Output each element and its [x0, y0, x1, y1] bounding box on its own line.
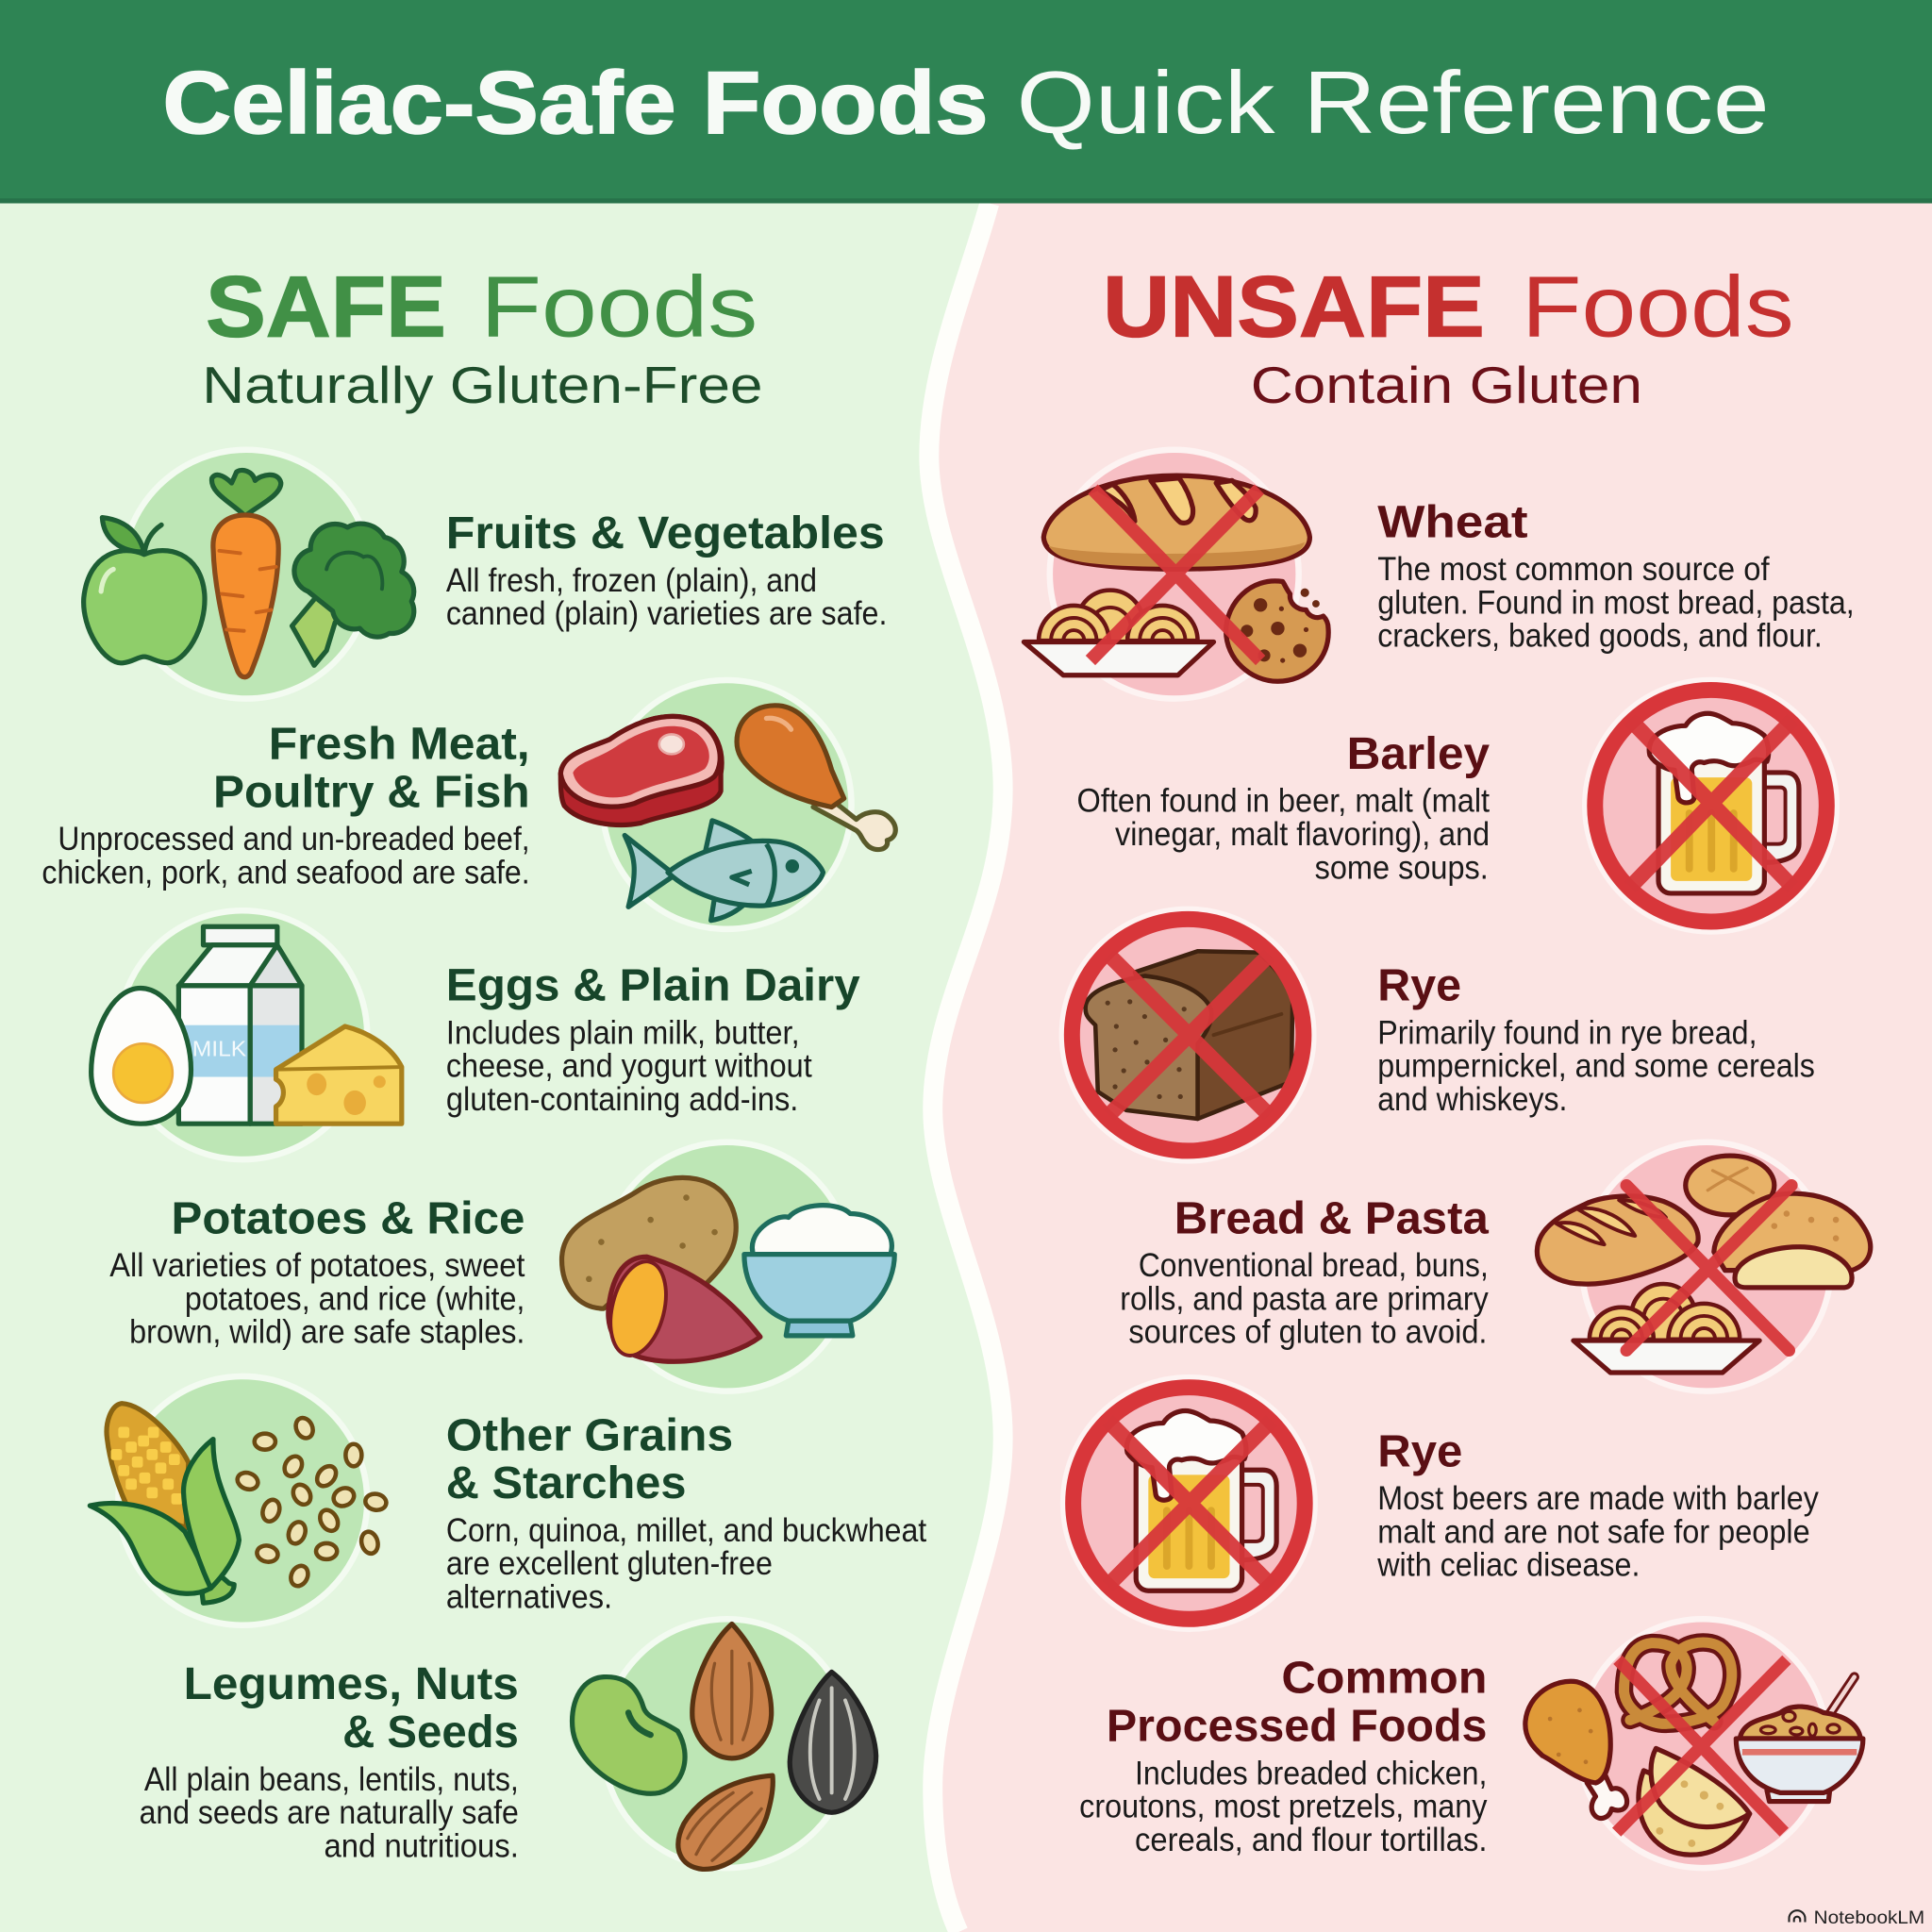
text: barley: Barley — [1347, 728, 1490, 779]
text: potatoes and rice — [109, 1192, 525, 1351]
text: rye — [1377, 960, 1815, 1118]
icon: chicken drumstick — [737, 706, 895, 850]
icon: bread loaf — [1043, 475, 1309, 569]
text: bread and pasta — [1120, 1192, 1490, 1351]
text: rye beer: Rye — [1377, 1425, 1462, 1476]
panel: rye beer — [1063, 1377, 1315, 1629]
text: legumes nuts seeds: All plain beans, lentils, nuts, — [144, 1761, 519, 1798]
panel: meat poultry fish — [560, 680, 895, 929]
icon: cookie — [1226, 581, 1328, 681]
heading: safe foods — [202, 259, 762, 414]
text: meat poultry fish: Poultry & Fish — [213, 767, 530, 818]
icon: pretzel — [1624, 1642, 1732, 1724]
icon: cross — [1109, 955, 1269, 1115]
icon: bean — [573, 1677, 685, 1793]
text: rye beer: with celiac disease. — [1376, 1547, 1640, 1584]
icon: cross — [1626, 1185, 1791, 1351]
text: processed foods — [1079, 1653, 1488, 1858]
icon: corn — [90, 1404, 239, 1603]
text: other grains: & Starches — [446, 1457, 687, 1508]
text: fruits and vegetables: canned (plain) varieties are safe. — [446, 595, 887, 632]
heading: safe foods: Foods — [480, 259, 758, 356]
text: other grains: Other Grains — [446, 1409, 733, 1460]
text: eggs and dairy: cheese, and yogurt without — [446, 1048, 812, 1085]
text: barley: vinegar, malt flavoring), and — [1115, 816, 1490, 853]
text: rye: Rye — [1377, 960, 1461, 1011]
icon: milk carton: MILK — [192, 1036, 247, 1060]
watermark: NotebookLM: NotebookLM — [1814, 1907, 1924, 1928]
text: other grains: are excellent gluten-free — [446, 1545, 773, 1582]
panel: legumes nuts seeds — [573, 1619, 876, 1869]
icon: broccoli — [292, 524, 414, 665]
title: Celiac-Safe Foods — [162, 53, 989, 152]
text: legumes nuts seeds: and nutritious. — [325, 1827, 519, 1864]
icon: loaf — [1537, 1196, 1698, 1284]
text: wheat — [1377, 496, 1855, 655]
text: processed foods: Processed Foods — [1107, 1701, 1487, 1752]
text: processed foods: Common — [1281, 1653, 1487, 1704]
text: barley: Often found in beer, malt (malt — [1077, 783, 1490, 820]
text: wheat: crackers, baked goods, and flour. — [1377, 618, 1823, 655]
panel: barley — [1585, 680, 1837, 931]
heading: unsafe foods: UNSAFE — [1103, 259, 1485, 356]
text: potatoes and rice: potatoes, and rice (white, — [185, 1280, 525, 1317]
text: barley — [1077, 728, 1490, 886]
text: bread and pasta: Conventional bread, buns, — [1139, 1247, 1489, 1284]
text: eggs and dairy: Eggs & Plain Dairy — [446, 960, 860, 1011]
text: rye: and whiskeys. — [1377, 1081, 1567, 1118]
icon: pasta plate — [1574, 1284, 1759, 1373]
heading: safe foods: Naturally Gluten-Free — [202, 356, 762, 414]
heading: unsafe foods: Foods — [1522, 259, 1794, 356]
panel: wheat — [1024, 450, 1328, 699]
panel: eggs and dairy — [92, 910, 402, 1159]
text: legumes nuts seeds — [140, 1658, 519, 1864]
text: other grains — [446, 1409, 926, 1615]
text: meat poultry fish: Fresh Meat, — [269, 719, 530, 770]
text: meat poultry fish: chicken, pork, and seafood are safe. — [42, 854, 530, 891]
text: potatoes and rice: Potatoes & Rice — [172, 1192, 525, 1243]
text: meat poultry fish: Unprocessed and un-breaded beef, — [58, 821, 530, 858]
text: eggs and dairy: Includes plain milk, butter, — [446, 1014, 800, 1051]
text: wheat: The most common source of — [1377, 551, 1770, 588]
panel: processed foods — [1525, 1619, 1863, 1868]
icon: beer mug — [1126, 1411, 1276, 1591]
heading: unsafe foods: Contain Gluten — [1251, 356, 1642, 414]
icon: almond 2 — [678, 1775, 773, 1869]
icon: beer mug — [1649, 713, 1799, 893]
title: Quick Reference — [1017, 53, 1770, 152]
text: rye: pumpernickel, and some cereals — [1377, 1048, 1815, 1085]
text: processed foods: cereals, and flour tortillas. — [1135, 1822, 1487, 1858]
text: other grains: Corn, quinoa, millet, and buckwheat — [446, 1512, 926, 1549]
icon: fried drumstick — [1525, 1681, 1627, 1818]
text: fruits and vegetables: All fresh, frozen (plain), and — [446, 562, 817, 599]
icon: grains — [235, 1415, 388, 1589]
icon: milk carton — [178, 926, 302, 1124]
text: rye beer: Most beers are made with barley — [1377, 1480, 1819, 1517]
panel: fruits and vegetables — [84, 450, 414, 699]
text: eggs and dairy — [446, 960, 860, 1118]
icon: bun — [1686, 1156, 1774, 1215]
icon: rice bowl — [744, 1206, 894, 1336]
text: barley: some soups. — [1315, 849, 1489, 886]
icon: sweet potato — [602, 1256, 760, 1361]
icon: cross — [1108, 1421, 1272, 1586]
icon: bread roll — [1714, 1193, 1871, 1288]
icon: almond — [692, 1624, 772, 1758]
text: potatoes and rice: All varieties of potatoes, sweet — [109, 1247, 525, 1284]
heading: safe foods: SAFE — [206, 259, 446, 356]
text: processed foods: Includes breaded chicken, — [1135, 1755, 1487, 1791]
panel: potatoes and rice — [562, 1142, 894, 1391]
text: eggs and dairy: gluten-containing add-ins. — [446, 1081, 798, 1118]
text: rye: Primarily found in rye bread, — [1377, 1014, 1757, 1051]
text: bread and pasta: sources of gluten to avoid. — [1128, 1314, 1487, 1351]
icon: tortilla — [1639, 1748, 1750, 1855]
icon: cheese — [276, 1026, 402, 1124]
icon: cross — [1630, 720, 1792, 887]
icon: pasta plate — [1024, 591, 1214, 675]
text: fruits and vegetables: Fruits & Vegetables — [446, 508, 885, 558]
icon: cross — [1617, 1659, 1787, 1832]
text: rye beer: malt and are not safe for people — [1377, 1513, 1810, 1550]
text: meat poultry fish — [42, 719, 530, 891]
text: wheat: gluten. Found in most bread, pasta, — [1377, 584, 1855, 621]
text: potatoes and rice: brown, wild) are safe staples. — [129, 1314, 525, 1351]
panel: rye — [1062, 909, 1313, 1160]
text: wheat: Wheat — [1377, 496, 1528, 547]
icon: potato — [562, 1177, 736, 1308]
icon: apple — [84, 518, 205, 663]
text: rye beer — [1376, 1425, 1819, 1584]
header banner — [0, 0, 1932, 204]
icon: fish — [625, 821, 823, 921]
text: bread and pasta: rolls, and pasta are primary — [1120, 1280, 1489, 1317]
icon: egg — [92, 989, 191, 1124]
heading: unsafe foods — [1103, 259, 1794, 414]
icon: sunflower seed — [790, 1672, 876, 1812]
text: legumes nuts seeds: & Seeds — [342, 1707, 519, 1757]
panel: other grains — [90, 1376, 388, 1625]
text: legumes nuts seeds: Legumes, Nuts — [184, 1658, 519, 1709]
text: fruits and vegetables — [446, 508, 887, 632]
icon: steak — [560, 716, 722, 824]
icon: carrot — [211, 471, 281, 677]
panel: bread and pasta — [1537, 1142, 1871, 1391]
icon: rye loaf — [1086, 951, 1292, 1119]
text: bread and pasta: Bread & Pasta — [1174, 1192, 1490, 1243]
icon: cross — [1091, 490, 1260, 660]
text: legumes nuts seeds: and seeds are naturally safe — [140, 1794, 519, 1831]
text: other grains: alternatives. — [446, 1578, 612, 1615]
text: processed foods: croutons, most pretzels, many — [1079, 1789, 1488, 1825]
icon: cereal bowl — [1736, 1677, 1863, 1802]
